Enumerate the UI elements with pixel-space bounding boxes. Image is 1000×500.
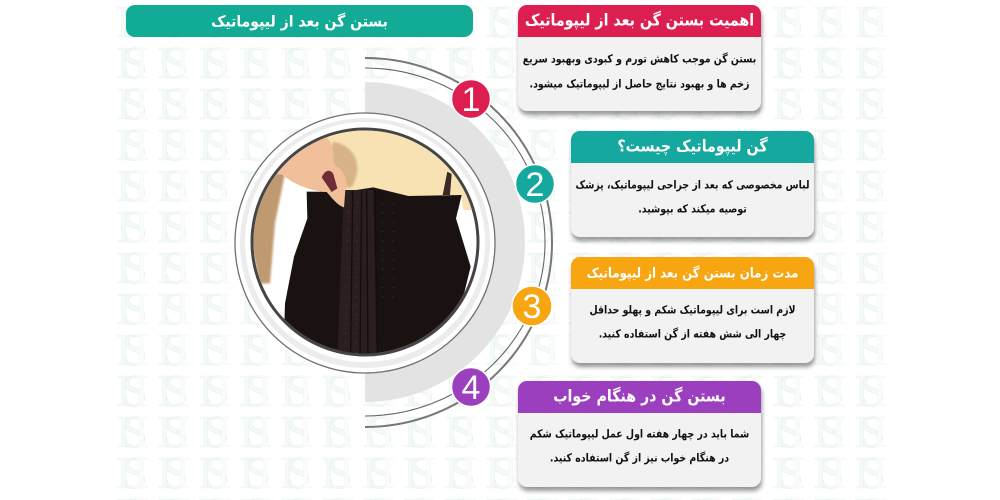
grey half band	[365, 82, 525, 402]
badge 4	[452, 368, 490, 407]
card 1 text: زخم ها و بهبود نتایج حاصل از لیپوماتیک میشود.	[530, 78, 749, 91]
card 1 heading	[518, 5, 761, 37]
badge 2	[516, 164, 554, 204]
badge 1	[452, 80, 490, 119]
central diagram: arcs and photo	[234, 57, 553, 428]
card 3 text	[589, 304, 796, 341]
card 2 text: توصیه میکند که بپوشید.	[638, 203, 747, 216]
outer arcs	[365, 57, 553, 428]
card 2 heading	[571, 131, 814, 163]
badge 3	[512, 286, 552, 326]
garment	[283, 187, 471, 357]
card 4 heading: بستن گن در هنگام خواب	[553, 388, 726, 406]
card 1 text: بستن گن موجب کاهش تورم و کبودی وبهبود سریع	[523, 53, 756, 66]
title bar	[126, 5, 473, 37]
card 3 text: چهار الی شش هفته از گن استفاده کنید.	[599, 328, 786, 341]
card 2 heading: گن لیپوماتیک چیست؟	[617, 138, 768, 156]
card 4 text: شما باید در چهار هفته اول عمل لیپوماتیک شکم	[530, 428, 749, 441]
card 1 text	[523, 52, 756, 91]
skin	[320, 127, 480, 210]
card 2 text	[576, 179, 809, 216]
title bar: بستن گن بعد از لیپوماتیک	[211, 13, 388, 31]
card 3 heading: مدت زمان بستن گن بعد از لیپوماتیک	[587, 265, 798, 281]
card 3: duration	[571, 257, 814, 363]
card 4 text	[530, 428, 749, 465]
card 3 text: لازم است برای لیپوماتیک شکم و پهلو حداقل	[589, 304, 796, 317]
card 4 text: در هنگام خواب نیز از گن استفاده کنید.	[550, 452, 729, 465]
card 2: what is it	[571, 131, 814, 237]
badge 3: 3	[523, 288, 541, 326]
card 2 text: لباس مخصوصی که بعد از جراحی لیپوماتیک، پزشک	[576, 179, 809, 192]
card 3 heading	[571, 257, 814, 289]
hook panel	[337, 190, 377, 357]
photo: waist shaper garment	[250, 127, 483, 360]
card 4 heading	[518, 381, 761, 413]
hand and arm	[278, 137, 346, 208]
badge 1: 1	[462, 81, 480, 119]
card 1 heading: اهمیت بستن گن بعد از لیپوماتیک	[525, 12, 754, 30]
white ring frame	[235, 113, 495, 373]
badge 2: 2	[526, 166, 544, 204]
badge 4: 4	[462, 369, 480, 407]
card 4: while sleeping	[518, 381, 761, 487]
card 1: importance	[518, 5, 761, 111]
